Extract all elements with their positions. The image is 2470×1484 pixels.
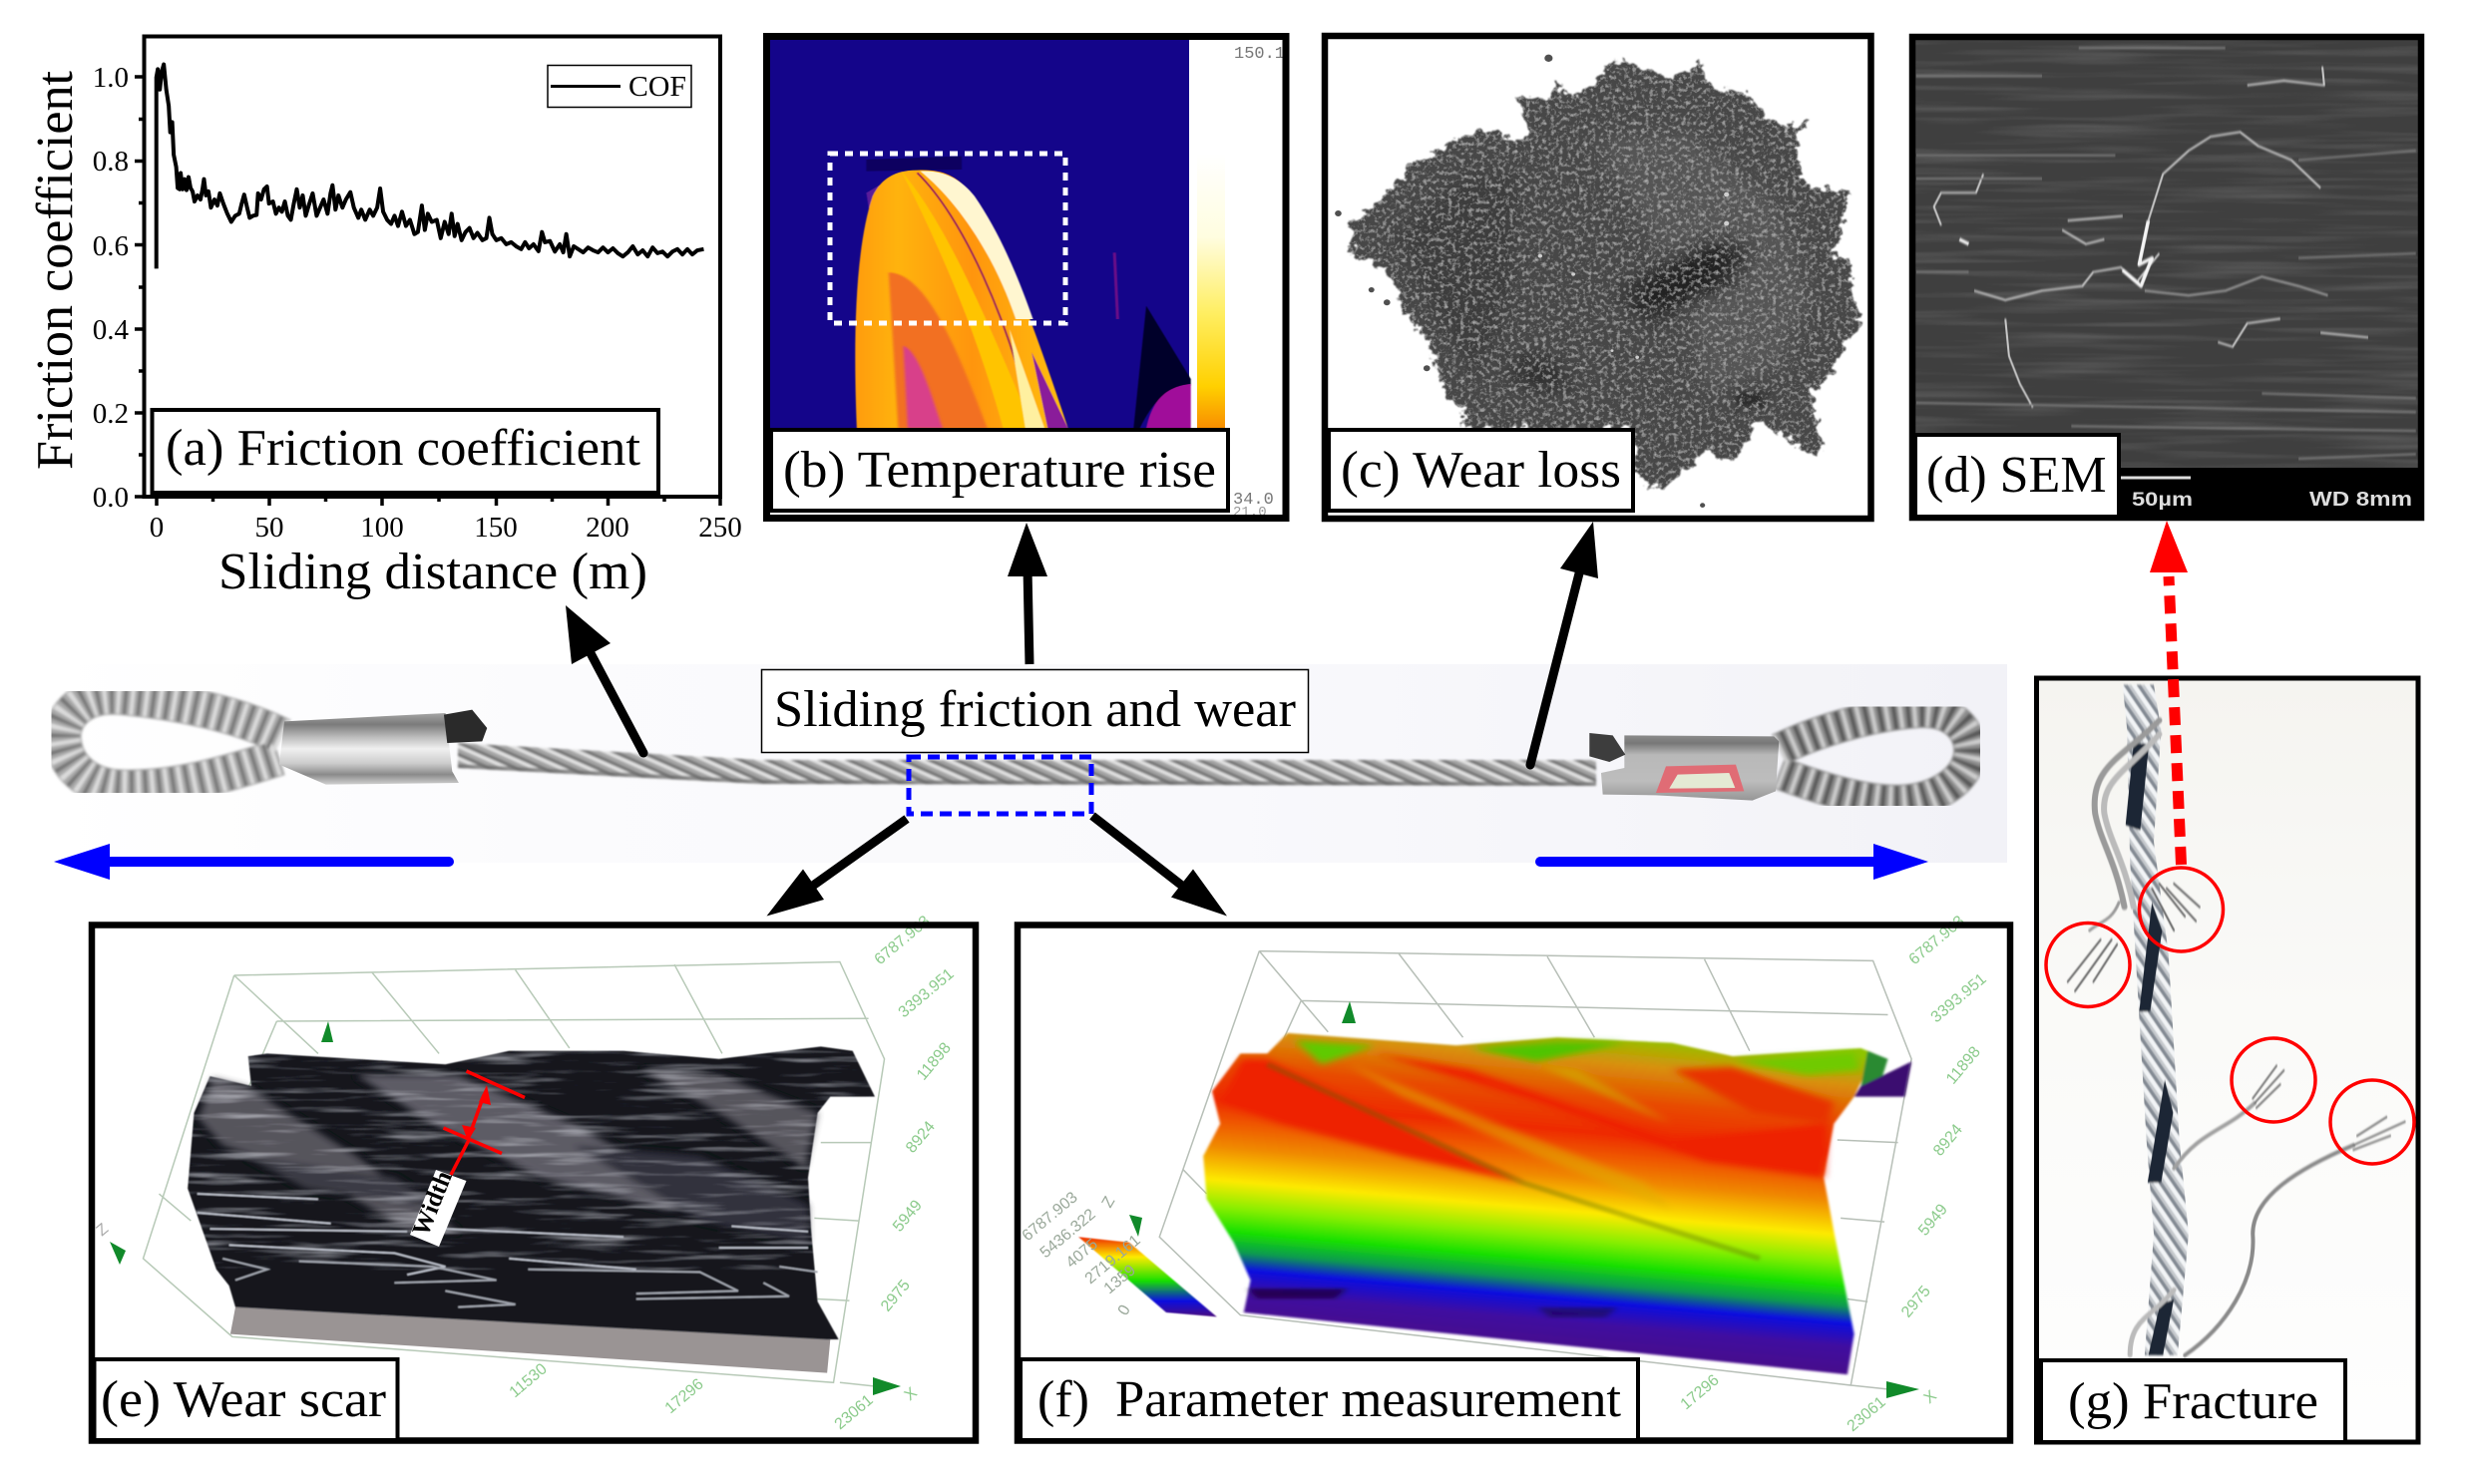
colour legend values: 0 bbox=[1115, 1302, 1134, 1318]
panel b: temperature rise thermal image bbox=[766, 36, 1286, 521]
green axis values: X bbox=[902, 1384, 921, 1404]
y axis tick labels: 0.6 bbox=[93, 230, 129, 262]
legend: COF bbox=[548, 66, 691, 108]
scale bar: 50µm bbox=[2132, 490, 2193, 511]
label: (f) Parameter measurement: Parameter measurement bbox=[1115, 1371, 1622, 1428]
x axis tick labels: 0 bbox=[150, 512, 164, 544]
green axis values: 2975 bbox=[878, 1277, 914, 1315]
label: (a) Friction coefficient bbox=[152, 410, 658, 493]
scanned rope surface bbox=[185, 1043, 885, 1373]
blue load arrow left bbox=[54, 844, 449, 880]
label: (g) Fracture bbox=[2041, 1360, 2345, 1442]
3D grid box bbox=[1159, 951, 1911, 1390]
thermal image: 34.0 bbox=[1233, 491, 1274, 510]
label: (d) SEM bbox=[1915, 435, 2119, 517]
label: (c) Wear loss bbox=[1329, 430, 1633, 511]
arrow: rope to parameter measurement bbox=[1092, 816, 1227, 916]
label: (d) SEM: (d) SEM bbox=[1926, 447, 2107, 504]
x axis tick labels: 150 bbox=[474, 512, 518, 544]
green axis values: 5949 bbox=[890, 1197, 926, 1236]
green axis values: 17296 bbox=[1678, 1371, 1723, 1413]
black data band bbox=[1912, 468, 2421, 518]
y axis title: Friction coefficient bbox=[27, 70, 84, 470]
chart axes and ticks bbox=[135, 36, 720, 506]
3D grid box bbox=[144, 961, 891, 1388]
green axis values bbox=[94, 913, 958, 1433]
green axis values bbox=[1678, 913, 1990, 1435]
panel d: SEM micrograph bbox=[1912, 37, 2421, 518]
green axis values: 23061 bbox=[832, 1391, 877, 1433]
callout: Sliding friction and wear: Sliding friction and wear bbox=[774, 681, 1296, 738]
blue load arrow right bbox=[1540, 844, 1928, 880]
panel g: fracture photograph bbox=[2036, 678, 2418, 1442]
panel frame bbox=[1018, 926, 2010, 1440]
colour legend bbox=[1078, 1237, 1217, 1316]
green axis arrows bbox=[1129, 1001, 1919, 1398]
green axis values: Z bbox=[94, 1221, 112, 1240]
panel frame bbox=[1325, 36, 1871, 519]
panel frame bbox=[1912, 37, 2421, 518]
green axis values: 8924 bbox=[1930, 1121, 1966, 1160]
x axis tick labels: 100 bbox=[360, 512, 404, 544]
label: (f) Parameter measurement: (f) bbox=[1037, 1371, 1089, 1428]
green axis values: 11898 bbox=[1943, 1043, 1984, 1088]
SEM image bbox=[1912, 37, 2421, 468]
colour legend values: 6787.903 bbox=[1020, 1189, 1081, 1245]
y axis tick labels: 1.0 bbox=[93, 62, 129, 94]
arrow: rope to wear scar bbox=[766, 819, 907, 916]
rope photograph bbox=[48, 664, 2007, 863]
colour legend values: Z bbox=[1099, 1194, 1118, 1211]
green axis values: 23061 bbox=[1845, 1393, 1889, 1435]
thermal image: 150.1 bbox=[1234, 45, 1285, 64]
left eye loop bbox=[63, 696, 282, 788]
arrow: rope to wear loss bbox=[1530, 522, 1598, 765]
thermal image: 21.0 bbox=[1233, 505, 1267, 521]
wire rope body bbox=[458, 743, 1596, 786]
green axis values: 17296 bbox=[662, 1375, 707, 1417]
red width marker bbox=[443, 1071, 525, 1175]
callout: Sliding friction and wear bbox=[762, 670, 1309, 752]
green axis values: 11898 bbox=[914, 1039, 955, 1084]
friction coefficient curve bbox=[157, 64, 703, 268]
green axis arrows bbox=[110, 1021, 901, 1395]
label: (f) Parameter measurement bbox=[1021, 1359, 1638, 1440]
red fracture circles bbox=[2046, 868, 2414, 1164]
label: (b) Temperature rise bbox=[771, 430, 1228, 511]
y axis tick labels: 0.0 bbox=[93, 482, 129, 514]
label: (e) Wear scar: (e) Wear scar bbox=[101, 1371, 386, 1428]
green axis values: 8924 bbox=[903, 1118, 939, 1157]
panel a: friction coefficient chart bbox=[27, 36, 742, 600]
legend: COF: COF bbox=[628, 71, 686, 103]
label: (e) Wear scar bbox=[94, 1359, 397, 1440]
y axis tick labels: 0.4 bbox=[93, 314, 130, 346]
panel frame bbox=[766, 36, 1286, 519]
green axis values: 3393.951 bbox=[1928, 970, 1990, 1026]
x axis tick labels: 200 bbox=[586, 512, 629, 544]
right sleeve bbox=[1589, 733, 1779, 801]
panel e: wear scar 3D image bbox=[92, 913, 976, 1440]
left sleeve bbox=[279, 710, 487, 785]
dashed selection box bbox=[830, 154, 1065, 323]
colour legend values bbox=[1020, 1189, 1144, 1318]
green axis values: 6787.903 bbox=[1906, 913, 1968, 968]
scale bar bbox=[2121, 477, 2193, 511]
x axis title: Sliding distance (m) bbox=[218, 544, 647, 600]
width label: Width bbox=[408, 1167, 458, 1240]
colour legend values: 2719.161 bbox=[1082, 1232, 1144, 1288]
label: (g) Fracture: (g) Fracture bbox=[2068, 1373, 2318, 1430]
green axis values: 3393.951 bbox=[896, 965, 958, 1021]
red dotted arrow: fracture to SEM bbox=[2150, 521, 2188, 865]
colour legend values: 5436.322 bbox=[1037, 1206, 1099, 1262]
panel f: parameter measurement 3D map bbox=[1018, 913, 2010, 1440]
powder pile bbox=[1335, 55, 1859, 508]
rainbow height surface bbox=[1203, 1033, 1911, 1374]
photo background bbox=[2036, 678, 2418, 1442]
label: (b) Temperature rise: (b) Temperature rise bbox=[783, 442, 1216, 499]
x axis tick labels: 50 bbox=[255, 512, 283, 544]
panel frame bbox=[92, 926, 976, 1440]
colour legend values: 4075 bbox=[1063, 1236, 1101, 1272]
y axis tick labels: 0.8 bbox=[93, 146, 129, 178]
arrow: rope to friction coefficient bbox=[566, 605, 643, 753]
panel frame bbox=[2037, 678, 2418, 1442]
label: (a) Friction coefficient: (a) Friction coefficient bbox=[166, 420, 641, 477]
working distance text: WD 8mm bbox=[2309, 489, 2412, 511]
green axis values: 5949 bbox=[1915, 1201, 1951, 1240]
y axis tick labels bbox=[93, 62, 130, 514]
green axis values: 6787.903 bbox=[872, 913, 934, 968]
fractured rope bbox=[2068, 685, 2405, 1355]
green axis values: 2975 bbox=[1898, 1283, 1934, 1321]
right eye loop bbox=[1779, 711, 1970, 801]
colour legend values: 1359 bbox=[1101, 1262, 1139, 1298]
x axis tick labels: 250 bbox=[698, 512, 742, 544]
dashed blue selection box on rope bbox=[909, 757, 1091, 814]
y axis tick labels: 0.2 bbox=[93, 398, 129, 430]
panel c: wear loss powder bbox=[1325, 36, 1871, 519]
x axis tick labels bbox=[150, 512, 742, 544]
thermal image bbox=[768, 37, 1285, 521]
arrow: rope to temperature rise bbox=[1008, 523, 1047, 664]
green axis values: X bbox=[1921, 1387, 1940, 1407]
green axis values: 11530 bbox=[507, 1360, 551, 1401]
label: (c) Wear loss: (c) Wear loss bbox=[1341, 442, 1621, 499]
